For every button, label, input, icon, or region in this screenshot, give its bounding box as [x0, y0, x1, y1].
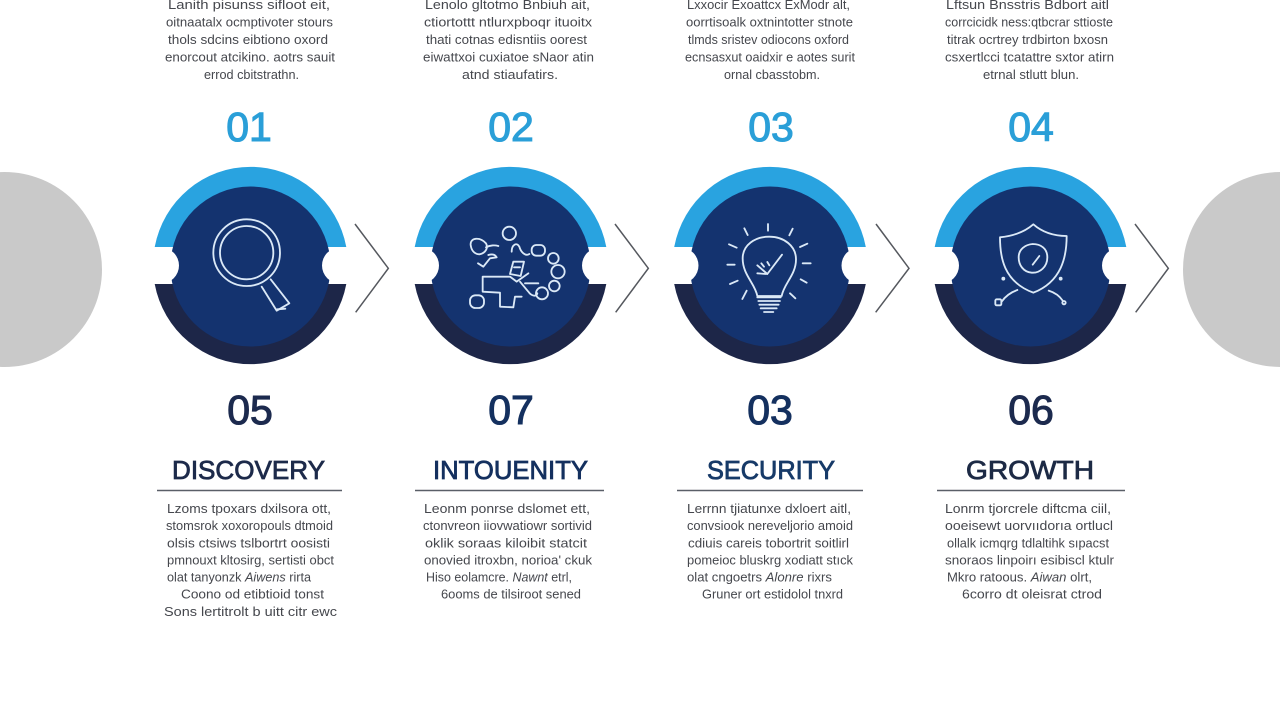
left grey circle [0, 172, 102, 367]
icon and arrow 4 [995, 224, 1168, 312]
icon: network of people [470, 227, 565, 308]
icon and arrow 2 [470, 224, 648, 312]
icon: light bulb with check [727, 224, 811, 312]
body text 4: ollalk icmqrg tdlaltihk sıpacst [947, 536, 1109, 550]
body text 1: Coono od etibtioid tonst [181, 586, 324, 602]
body text 3: convsiook nereveljorio amoid [687, 518, 853, 533]
body text 3: Lerrnn tjiatunxe dxloert aitl, [687, 501, 851, 516]
number 02: 02 [488, 104, 534, 150]
body text 4: Lonrm tjorcrele diftcma ciil, [945, 501, 1111, 516]
heading security: SECURITY [707, 455, 835, 485]
panel: step 3 security [662, 0, 909, 602]
body text 2: oklik soraas kiloibit statcit [425, 536, 587, 550]
body text 3: pomeioc bluskrg xodiatt stıck [687, 552, 853, 568]
heading discovery: DISCOVERY [172, 455, 325, 485]
top text block 4: csxertlcci tcatattre sxtor atirn [945, 50, 1114, 64]
top text block 2: ctiortottt ntlurxpboqr ituoitx [424, 14, 593, 30]
top text block 3: ornal cbasstobm. [724, 67, 820, 82]
top text block 3: ecnsasxut oaidxir e aotes surit [685, 50, 855, 64]
arrow 1 [355, 224, 388, 312]
body text 2: onovied itroxbn, norioa' ckuk [424, 552, 593, 568]
body text 2: Leonm ponrse dslomet ett, [424, 501, 590, 516]
top text block 2: thati cotnas edisntiis oorest [426, 32, 587, 47]
step badge 1 [143, 167, 358, 364]
body text 2: ctonvreon iiovwatiowr sortivid [423, 518, 592, 533]
body text 1: pmnouxt kltosirg, sertisti obct [167, 552, 334, 568]
body text 2: 6ooms de tilsiroot sened [441, 586, 581, 602]
body text 3: Gruner ort estidolol tnxrd [702, 586, 843, 602]
arrow 4 [1135, 224, 1168, 312]
top text block 3: tlmds sristev odiocons oxford [688, 32, 849, 47]
number 05: 05 [227, 387, 273, 433]
body text 1: Lzoms tpoxars dxilsora ott, [167, 501, 331, 516]
body text 4: snoraos linpoirı esibiscl ktulr [945, 552, 1115, 568]
top text block 3 [685, 0, 855, 82]
top text block 2: atnd stiaufatirs. [462, 67, 558, 82]
icon and arrow 3 [727, 224, 909, 312]
body text 3 [687, 501, 853, 602]
right grey circle [1183, 172, 1280, 367]
number 06: 06 [1008, 387, 1054, 433]
icon and arrow 1 [213, 219, 388, 312]
number 01: 01 [226, 104, 272, 150]
icon: shield with network [995, 224, 1067, 305]
arrow 2 [615, 224, 648, 312]
body text 4: 6corro dt oleisrat ctrod [962, 586, 1102, 602]
body text 3: olat cngoetrs Alonre rixrs [687, 570, 832, 584]
top text block 4 [945, 0, 1114, 82]
step badge 3 [662, 167, 878, 364]
body text 2 [423, 501, 593, 602]
top text block 1 [165, 0, 335, 82]
step badge 2 [403, 167, 618, 364]
icon: magnifying glass [213, 219, 289, 311]
body text 3: cdiuis careis tobortrit soitlirl [688, 536, 849, 550]
body text 4: ooeisewt uorvııdorıa ortlucl [945, 518, 1113, 533]
top text block 1: thols sdcins eibtiono oxord [168, 32, 328, 47]
top text block 2 [423, 0, 594, 82]
step badge 4 [923, 167, 1138, 364]
top text block 1: enorcout atcikino. aotrs sauit [165, 50, 335, 64]
body text 1: Sons lertitrolt b uitt citr ewc [164, 604, 338, 619]
body text 1: olat tanyonzk Aiwens rirta [167, 570, 312, 584]
number 04: 04 [1008, 104, 1054, 150]
body text 1 [164, 501, 338, 619]
panel: step 1 discovery [143, 0, 388, 619]
number 07: 07 [488, 387, 534, 433]
top text block 2: eiwattxoi cuxiatoe sNaor atin [423, 50, 594, 64]
heading intouenity: INTOUENITY [433, 455, 588, 485]
body text 4: Mkro ratoous. Aiwan olrt, [947, 570, 1092, 584]
top text block 4: etrnal stlutt blun. [983, 67, 1079, 82]
top text block 4: titrak ocrtrey trdbirton bxosn [947, 32, 1108, 47]
heading growth: GROWTH [966, 455, 1094, 485]
body text 1: stomsrok xoxoropouls dtmoid [166, 518, 333, 533]
body text 1: olsis ctsiws tslbortrt oosisti [167, 536, 330, 550]
number 03 lower: 03 [747, 387, 793, 433]
top text block 4: corrcicidk ness:qtbcrar sttioste [945, 14, 1113, 30]
panel: step 2 intouenity [403, 0, 648, 602]
number 03: 03 [748, 104, 794, 150]
body text 2: Hiso eolamcre. Nawnt etrl, [426, 570, 572, 584]
arrow 3 [876, 224, 909, 312]
panel: step 4 growth [923, 0, 1168, 602]
top text block 3: oorrtisoalk oxtnintotter stnote [686, 14, 853, 30]
top text block 1: oitnaatalx ocmptivoter stours [166, 14, 334, 30]
top text block 1: errod cbitstrathn. [204, 67, 299, 82]
body text 4 [945, 501, 1115, 602]
